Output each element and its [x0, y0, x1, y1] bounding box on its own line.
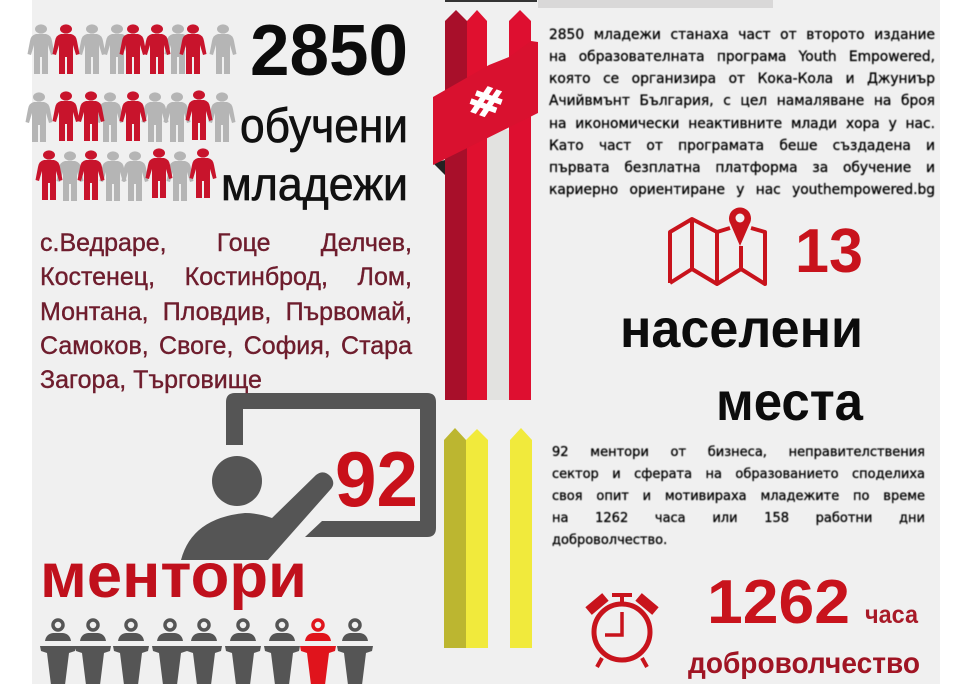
list of towns: с.Ведраре, Гоце Делчев, — [40, 229, 412, 257]
central ribbon: red posts — [445, 10, 531, 400]
list of towns: Монтана, Пловдив, Първомай, — [40, 298, 412, 326]
paragraph: about the programme: Като част от програмата беше създадена и — [549, 138, 935, 154]
paragraph: about the programme — [548, 27, 936, 198]
paragraph: about the mentors: своя опит и мотивираха младежите по време — [552, 489, 925, 504]
paragraph: about the mentors — [552, 444, 926, 548]
paragraph: about the programme: Ачийвмънт България, с цел намаляване на броя — [549, 93, 935, 109]
hash symbol: # — [462, 76, 509, 130]
label: часа: часа — [865, 601, 919, 629]
number 2850: 2850 — [250, 11, 408, 91]
icon: teacher at board — [181, 393, 436, 560]
ribbon band with puzzle hash — [433, 41, 538, 175]
label: обучени: обучени — [240, 100, 408, 153]
people pictogram: 2850 trainees — [26, 24, 236, 201]
central ribbon: yellow posts — [444, 428, 532, 648]
paragraph: about the programme: кариерно ориентиране у нас youthempowered.bg — [549, 182, 935, 198]
label: населени: населени — [620, 299, 863, 359]
paragraph: about the programme: първата безплатна платформа за обучение и — [549, 160, 935, 176]
paragraph: about the mentors: доброволчество. — [552, 533, 667, 548]
top strip — [445, 0, 773, 8]
row of mentors at podiums — [40, 620, 373, 684]
list of towns — [40, 229, 412, 394]
paragraph: about the mentors: 92 ментори от бизнеса, неправителствения — [552, 445, 925, 460]
icon: alarm clock — [585, 593, 659, 667]
list of towns: Самоков, Своге, София, Стара — [40, 332, 412, 360]
paragraph: about the programme: на икономически неактивните млади хора у нас. — [549, 116, 935, 132]
paragraph: about the programme: на образователната програма Youth Empowered, — [549, 49, 935, 65]
list of towns: Загора, Търговище — [40, 366, 262, 394]
paragraph: about the mentors: сектор и сферата на образованието споделиха — [552, 467, 925, 482]
label: ментори: ментори — [40, 541, 307, 611]
label: места: места — [716, 372, 864, 432]
paragraph: about the programme: която се организира от Кока-Кола и Джуниър — [549, 71, 935, 87]
list of towns: Костенец, Костинброд, Лом, — [40, 263, 412, 291]
paragraph: about the mentors: на 1262 часа или 158 работни дни — [552, 511, 925, 526]
icon: map with pin — [670, 207, 765, 284]
label: доброволчество: доброволчество — [688, 647, 920, 680]
number 92: 92 — [335, 435, 418, 523]
number 13: 13 — [795, 217, 863, 286]
label: младежи: младежи — [221, 158, 408, 210]
number 1262: 1262 — [707, 568, 850, 637]
paragraph: about the programme: 2850 младежи станаха част от второто издание — [549, 27, 935, 43]
